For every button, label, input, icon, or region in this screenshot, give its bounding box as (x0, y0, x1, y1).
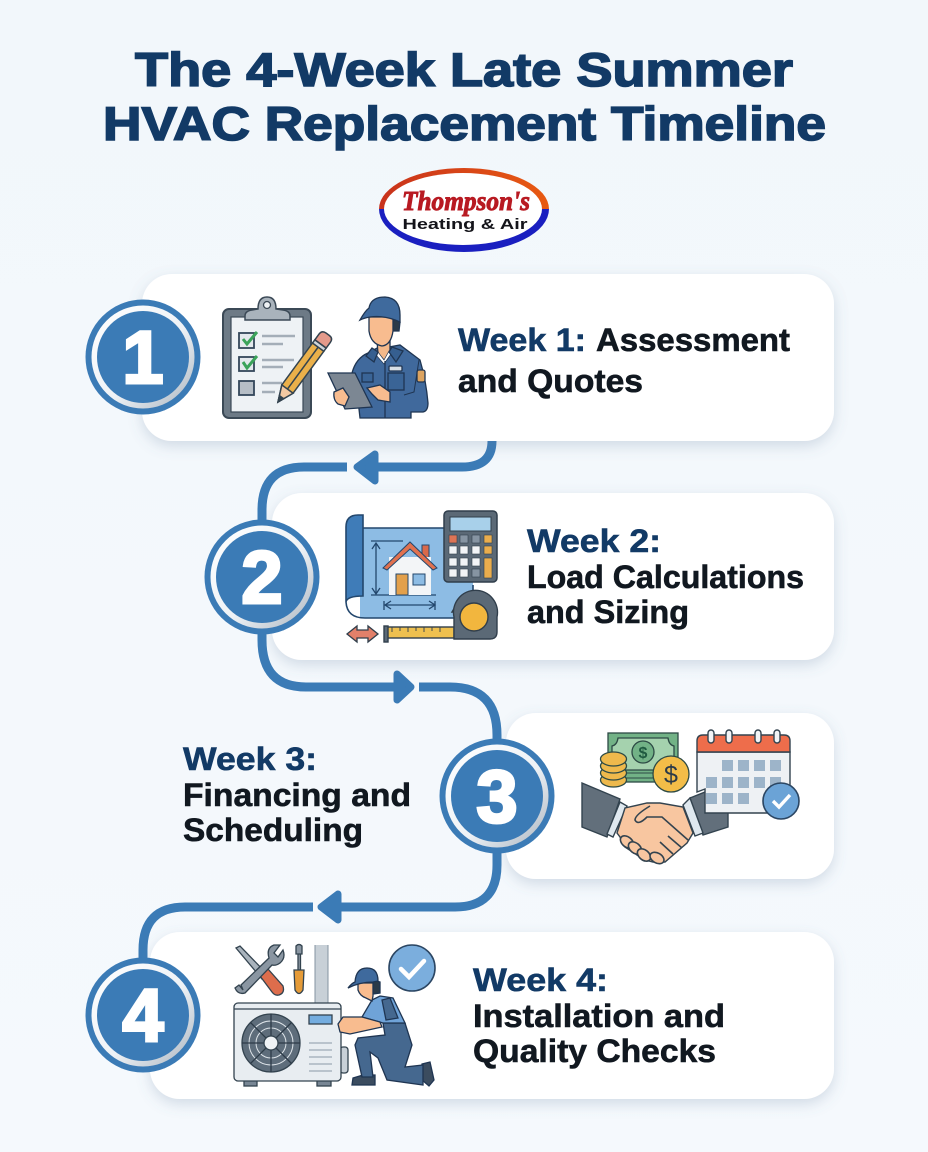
icon: calendar (697, 730, 799, 819)
title: The 4-Week Late Summer (135, 43, 793, 96)
badge: step 1 (86, 300, 200, 414)
icon: double arrow (347, 626, 378, 642)
text: week 4 heading: Quality Checks (473, 1033, 716, 1069)
badge: step 1: 1 (122, 316, 164, 399)
icon: blueprint and house (346, 515, 473, 618)
text: week 2 heading (527, 523, 804, 630)
text: week 2 heading: Week 2: (527, 523, 661, 559)
icon: tape measure (384, 590, 498, 642)
badge: step 4 (86, 958, 200, 1072)
icon: installer kneeling (338, 945, 435, 1086)
icon: technician with tablet (328, 297, 428, 418)
icon: calculator (444, 511, 497, 582)
logo: Thompson's Heating & Air: Thompson's (402, 186, 530, 216)
panel: week 1 (142, 274, 834, 441)
panel: week 3 image card (506, 713, 834, 879)
text: week 4 heading: Week 4: (473, 962, 608, 998)
text: week 3 heading: Week 3: (183, 741, 317, 777)
icon: cash and coins (600, 733, 689, 792)
title: HVAC Replacement Timeline (103, 97, 826, 150)
panel: week 2 (272, 493, 834, 660)
panel: week 4 (150, 932, 834, 1099)
text: week 3 heading (183, 741, 411, 848)
logo: Thompson's Heating & Air: Heating & Air (402, 217, 528, 233)
icon: wrench and screwdrivers (235, 944, 304, 995)
icon: cash and coins: $ (664, 761, 678, 789)
icon: handshake (582, 783, 728, 866)
text: week 4 heading (473, 962, 725, 1069)
badge: step 2: 2 (241, 536, 283, 619)
badge: step 3 (440, 738, 554, 854)
text: week 1 heading (458, 322, 790, 399)
icon: clipboard checklist (223, 297, 333, 418)
text: week 3 heading: Financing and (183, 777, 411, 813)
badge: step 2 (204, 520, 320, 634)
logo: Thompson's Heating & Air (379, 168, 549, 252)
icon: cash and coins: $ (639, 745, 648, 762)
text: week 1 heading: and Quotes (458, 363, 643, 399)
badge: step 3: 3 (476, 755, 518, 838)
badge: step 4: 4 (122, 974, 164, 1057)
arrow: week 1 to week 2 (262, 436, 492, 530)
text: week 4 heading: Installation and (473, 998, 725, 1034)
text: week 3 heading: Scheduling (183, 812, 363, 848)
icon: outdoor AC unit (234, 945, 348, 1086)
text: week 1 heading: Week 1: (458, 322, 586, 358)
arrow: week 3 to week 4 (143, 842, 497, 970)
text: week 2 heading: Load Calculations (527, 559, 804, 595)
title (103, 43, 826, 150)
arrow: week 2 to week 3 (262, 625, 497, 750)
text: week 1 heading: Assessment (596, 322, 790, 358)
text: week 2 heading: and Sizing (527, 594, 689, 630)
